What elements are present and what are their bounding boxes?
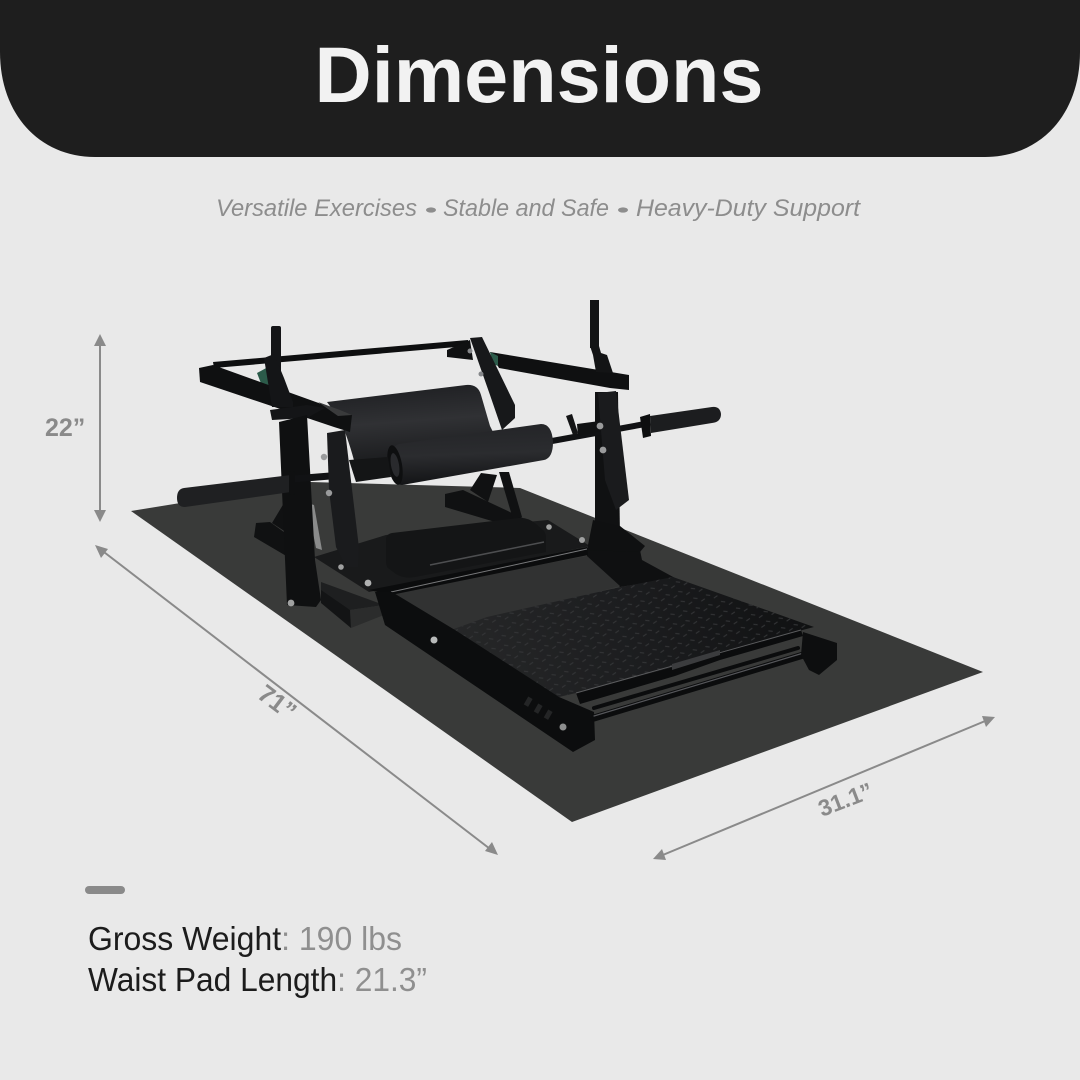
gross weight: Gross Weight: 190 lbs — [88, 920, 402, 957]
left arm — [288, 430, 585, 606]
seat pad — [386, 518, 546, 578]
bar right — [552, 407, 721, 441]
accent pill — [85, 886, 125, 894]
header banner — [0, 0, 1080, 157]
label: 22 inches: 22” — [45, 414, 85, 442]
rear left base — [254, 503, 322, 575]
arrow: length 71 inches — [95, 545, 498, 855]
right arm — [597, 391, 629, 510]
right upright — [587, 392, 645, 552]
subtitle: Heavy-Duty Support — [636, 195, 861, 222]
left post — [264, 326, 325, 420]
title: Dimensions — [314, 30, 764, 119]
large roller — [327, 385, 495, 468]
small roller — [385, 424, 553, 486]
diagonal arm — [447, 337, 515, 430]
rear cross beam — [587, 548, 675, 587]
hip thrust machine — [177, 300, 837, 752]
right frame bar — [490, 352, 629, 390]
arrow: width 31.1 inches — [653, 716, 995, 860]
subtitle: Versatile Exercises — [216, 195, 417, 222]
left block — [321, 582, 384, 628]
foot plate — [451, 577, 814, 704]
roller bracket — [349, 457, 391, 482]
specifications — [88, 920, 427, 998]
left upright — [279, 415, 321, 607]
right foot — [801, 632, 837, 675]
rods — [594, 648, 810, 718]
rear right base — [445, 472, 527, 530]
waist pad length: Waist Pad Length: 21.3” — [88, 961, 427, 998]
bar left — [177, 471, 330, 507]
floor mat — [131, 482, 983, 822]
subtitle: Stable and Safe — [443, 195, 609, 222]
side beam — [375, 592, 595, 752]
arrow: height 22 inches — [94, 334, 106, 522]
rear top bar — [213, 340, 468, 368]
right post — [590, 300, 613, 373]
subtitle — [216, 195, 861, 222]
label: 71 inches: 71” — [252, 679, 301, 726]
seat plate edge — [369, 547, 588, 595]
label: 31.1 inches: 31.1” — [814, 777, 876, 822]
opening showing mat — [391, 556, 620, 630]
front top bar — [199, 365, 352, 432]
green bushings — [257, 366, 274, 386]
seat plate — [314, 520, 590, 592]
